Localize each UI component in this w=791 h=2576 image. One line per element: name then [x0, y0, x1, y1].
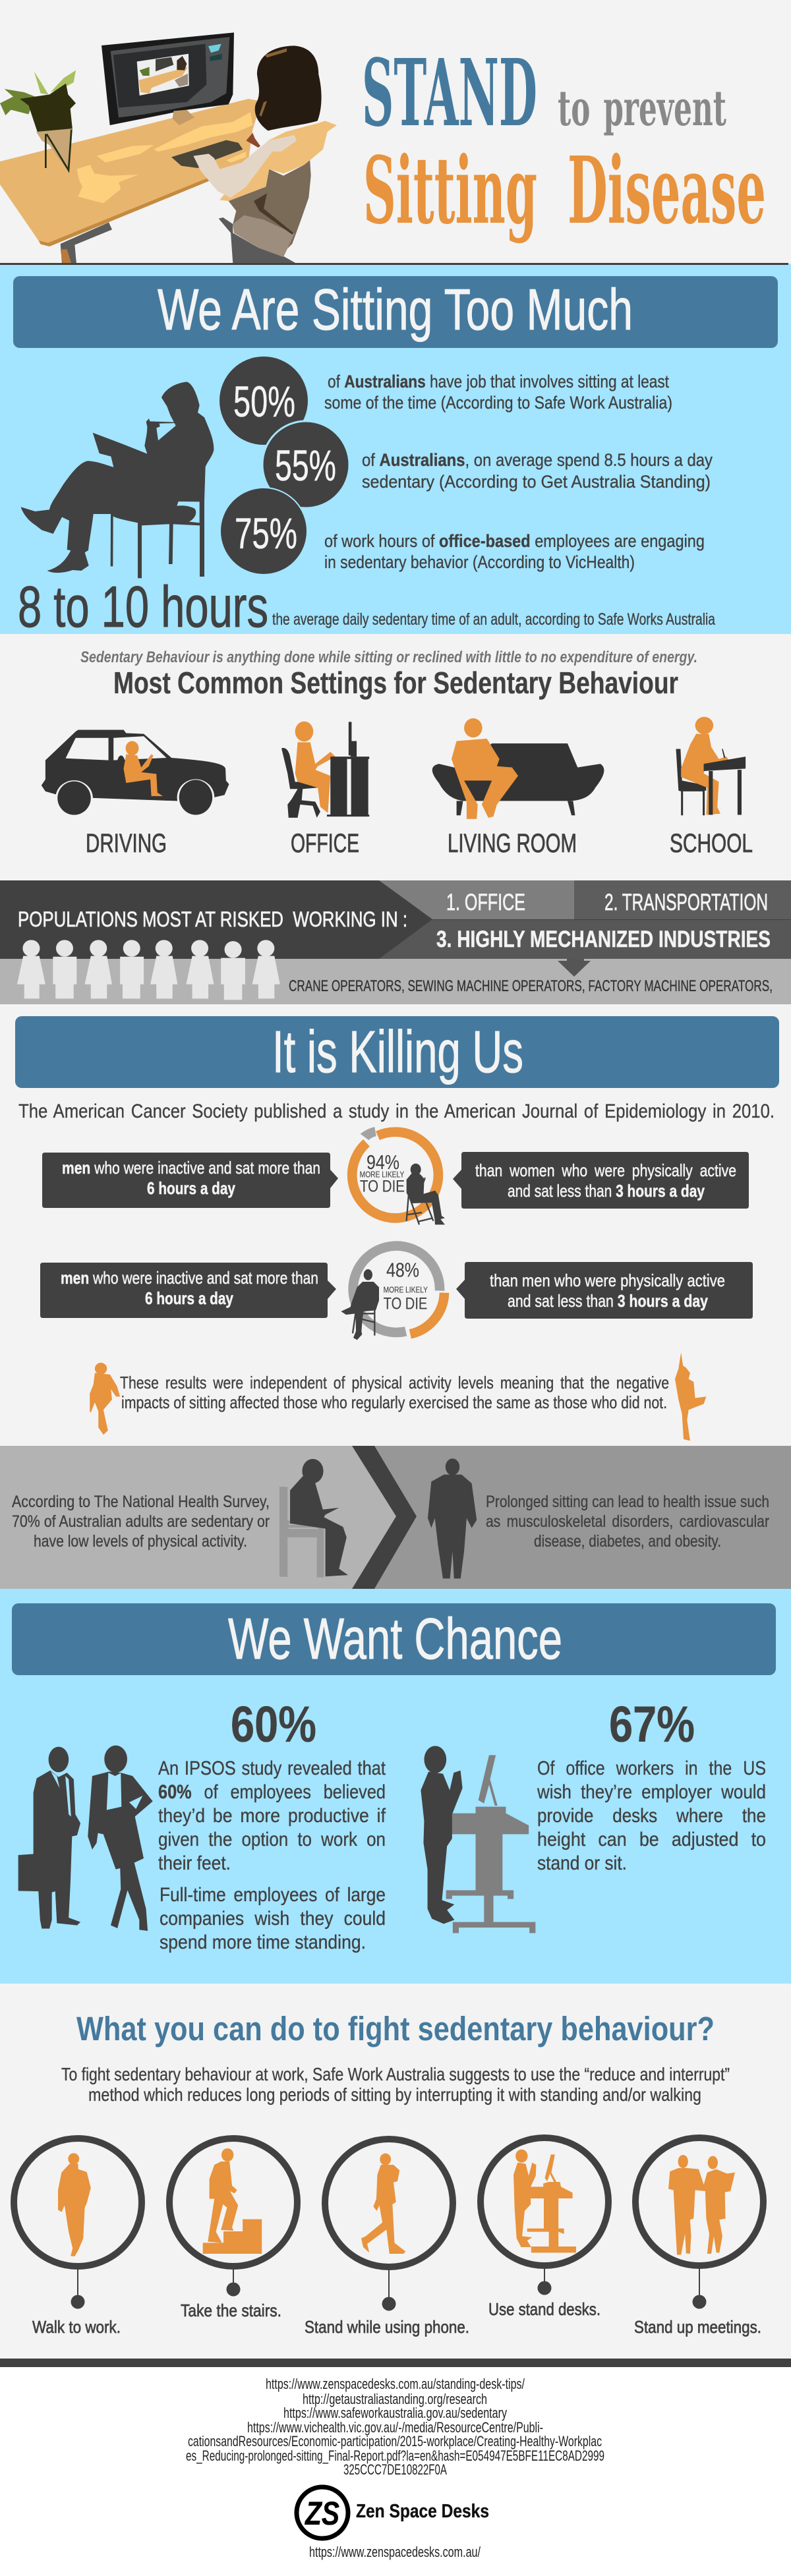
tip: stand up meetings [634, 2138, 763, 2337]
panel: header: Sitting [363, 137, 537, 245]
stat: 67%: 67% [609, 1696, 695, 1753]
callout: men 3 hours: and sat less than 3 hours a day [508, 1291, 708, 1311]
icons: people row [17, 940, 280, 1000]
heading bar [15, 1016, 779, 1088]
text: national health survey: 70% of Australian adults are sedentary or [12, 1512, 270, 1531]
donut: 48%: TO DIE [384, 1295, 427, 1313]
text: sources: 325CCC7DE10822F0A [343, 2461, 447, 2478]
text: sources: https://www.safeworkaustralia.gov.au/sedentary [283, 2405, 507, 2421]
donut: 94% [352, 1127, 445, 1224]
text: ipsos study: An IPSOS study revealed that [158, 1758, 386, 1779]
panel: it is killing us [15, 1016, 779, 1441]
heading bar: We Are Sitting Too Much [158, 277, 633, 342]
arrow: down [558, 959, 591, 977]
tip: take the stairs [169, 2138, 297, 2320]
text: sources [186, 2376, 604, 2478]
text: ipsos study: spend more time standing. [160, 1932, 366, 1953]
text: prolonged sitting [486, 1493, 769, 1551]
item: office: 1. OFFICE [446, 890, 525, 915]
text: website: https://www.zenspacedesks.com.au/ [309, 2544, 481, 2560]
donut: 94%: TO DIE [360, 1178, 405, 1196]
panel: populations most at risk [0, 880, 791, 1004]
logo: zen space desks: ZS [304, 2495, 339, 2532]
callout: men 6 hours: men who were inactive and sat more than [62, 1158, 320, 1178]
panel: header: STAND [362, 40, 537, 148]
donut: 48% [341, 1246, 444, 1340]
donut: 94%: 94% [366, 1151, 399, 1174]
text: sources: es_Reducing-prolonged-sitting_Final-Report.pdf?la=en&hash=E054947E5BFE11EC8AD2999 [186, 2447, 604, 2464]
text: sources: https://www.vichealth.vic.gov.au/-/media/ResourceCentre/Publi- [247, 2419, 543, 2436]
tip: walk to work [14, 2138, 142, 2337]
heading bar: It is Killing Us [272, 1019, 523, 1085]
tip: use stand desks [481, 2138, 608, 2319]
panel: we are sitting too much [0, 263, 791, 639]
text: ipsos study: companies wish they could [160, 1908, 386, 1930]
stat: 55%: sedentary (According to Get Australia Standing) [362, 472, 711, 492]
text: populations: POPULATIONS MOST AT RISKED WORKING IN : [18, 907, 407, 931]
text: national health survey: have low levels of physical activity. [34, 1532, 247, 1551]
icon: man at standing desk [421, 1746, 535, 1933]
text: office workers: stand or sit. [537, 1852, 627, 1874]
panel: common settings [42, 648, 753, 858]
icon: office [281, 722, 369, 818]
panel: health survey band [0, 1446, 791, 1589]
stat: 8 to 10 hours: 8 to 10 hours [18, 574, 268, 639]
stat: 50%: some of the time (According to Safe Work Australia) [324, 393, 672, 413]
icon: school [676, 717, 746, 815]
text: national health survey: According to The National Health Survey, [12, 1493, 270, 1511]
stat: 8 to 10 hours [18, 574, 715, 639]
text: national health survey [12, 1493, 270, 1551]
label: office: OFFICE [291, 829, 359, 858]
chevron [352, 1446, 417, 1589]
logo: zen space desks: Zen Space Desks [356, 2501, 489, 2522]
text: independent results [120, 1373, 669, 1412]
icon: business man and woman [18, 1746, 153, 1931]
logo: zen space desks [297, 2487, 489, 2538]
callout: men 6 hours [42, 1153, 338, 1208]
label: school: SCHOOL [670, 829, 753, 858]
stat: 50%: of Australians have job that involves sitting at least [328, 372, 669, 391]
text: ipsos study: Full-time employees of large [160, 1884, 386, 1906]
callout: men 6 hours second: 6 hours a day [145, 1288, 233, 1308]
tip: stand up meetings: Stand up meetings. [634, 2317, 761, 2337]
tip: stand while using phone: Stand while using phone. [305, 2317, 469, 2337]
callout: women 3 hours [453, 1152, 749, 1209]
text: ipsos study: they’d be more productive if [158, 1805, 386, 1827]
callout: men 3 hours [456, 1262, 753, 1319]
callout: men 6 hours second: men who were inactive and sat more than [61, 1268, 318, 1288]
tip: use stand desks: Use stand desks. [488, 2299, 601, 2319]
stat: 50%: 50% [233, 377, 295, 426]
text: office workers: height can be adjusted to [537, 1829, 766, 1850]
callout: women 3 hours: and sat less than 3 hours a day [508, 1181, 705, 1201]
text: office workers [537, 1758, 766, 1874]
icon: orange figure left [90, 1363, 120, 1435]
text: ipsos study [158, 1758, 386, 1953]
panel: what you can do [14, 2010, 763, 2337]
stat: 75%: 75% [235, 509, 297, 558]
stat: 75% [220, 488, 705, 575]
icon: standing person [428, 1458, 477, 1578]
callout: men 6 hours second [40, 1263, 336, 1318]
heading bar: We Want Chance [228, 1606, 562, 1671]
icon: seated person [279, 1459, 348, 1578]
donut: 48%: 48% [386, 1259, 419, 1281]
stat: 60%: 60% [231, 1696, 316, 1753]
panel: we want chance [0, 1589, 791, 1984]
callout: men 6 hours: 6 hours a day [147, 1178, 235, 1198]
callout: women 3 hours: than women who were physically active [475, 1160, 736, 1180]
text: independent results: impacts of sitting affected those who regularly exercised the same as those who did not. [121, 1392, 667, 1412]
icon: man sitting reading [21, 382, 214, 578]
stat: 55% [262, 421, 713, 508]
text: sources: cationsandResources/Economic-participation/2015-workplace/Creating-Healthy-Workplac [188, 2433, 602, 2449]
stat: 75%: in sedentary behavior (According to VicHealth) [324, 552, 635, 572]
text: prolonged sitting: disease, diabetes, and obesity. [534, 1532, 721, 1551]
stat: 50% [220, 357, 672, 445]
stat: 55%: of Australians, on average spend 8.5 hours a day [362, 450, 713, 470]
heading bar [12, 1603, 776, 1675]
donut: 48%: MORE LIKELY [384, 1285, 428, 1295]
text: reduce and interrupt [61, 2064, 730, 2105]
stat: 75%: of work hours of office-based employees are engaging [324, 531, 705, 551]
icon: living room [432, 718, 604, 819]
illustration: woman at desk [0, 32, 337, 264]
text: ipsos study: 60% of employees believed [158, 1781, 386, 1803]
donut: 94%: MORE LIKELY [360, 1170, 405, 1180]
icon: driving [42, 730, 229, 816]
stat: 55%: 55% [275, 441, 336, 490]
panel: footer [0, 2359, 791, 2576]
text: sources: https://www.zenspacedesks.com.au/standing-desk-tips/ [266, 2376, 525, 2392]
text: sources: http://getaustraliastanding.org/research [303, 2391, 487, 2407]
text: ipsos study: given the option to work on [158, 1829, 386, 1850]
icon: orange figure right [675, 1352, 706, 1441]
panel: header [0, 32, 766, 264]
text: ipsos study: their feet. [158, 1852, 231, 1874]
text: independent results: These results were independent of physical activity levels meaning that the negative [120, 1373, 669, 1392]
tip: stand while using phone [305, 2139, 469, 2337]
label: living room: LIVING ROOM [448, 829, 577, 858]
label: driving: DRIVING [86, 829, 167, 858]
tip: take the stairs: Take the stairs. [181, 2301, 281, 2320]
callout: men 3 hours: than men who were physically active [490, 1271, 725, 1290]
tip: walk to work: Walk to work. [32, 2317, 121, 2337]
